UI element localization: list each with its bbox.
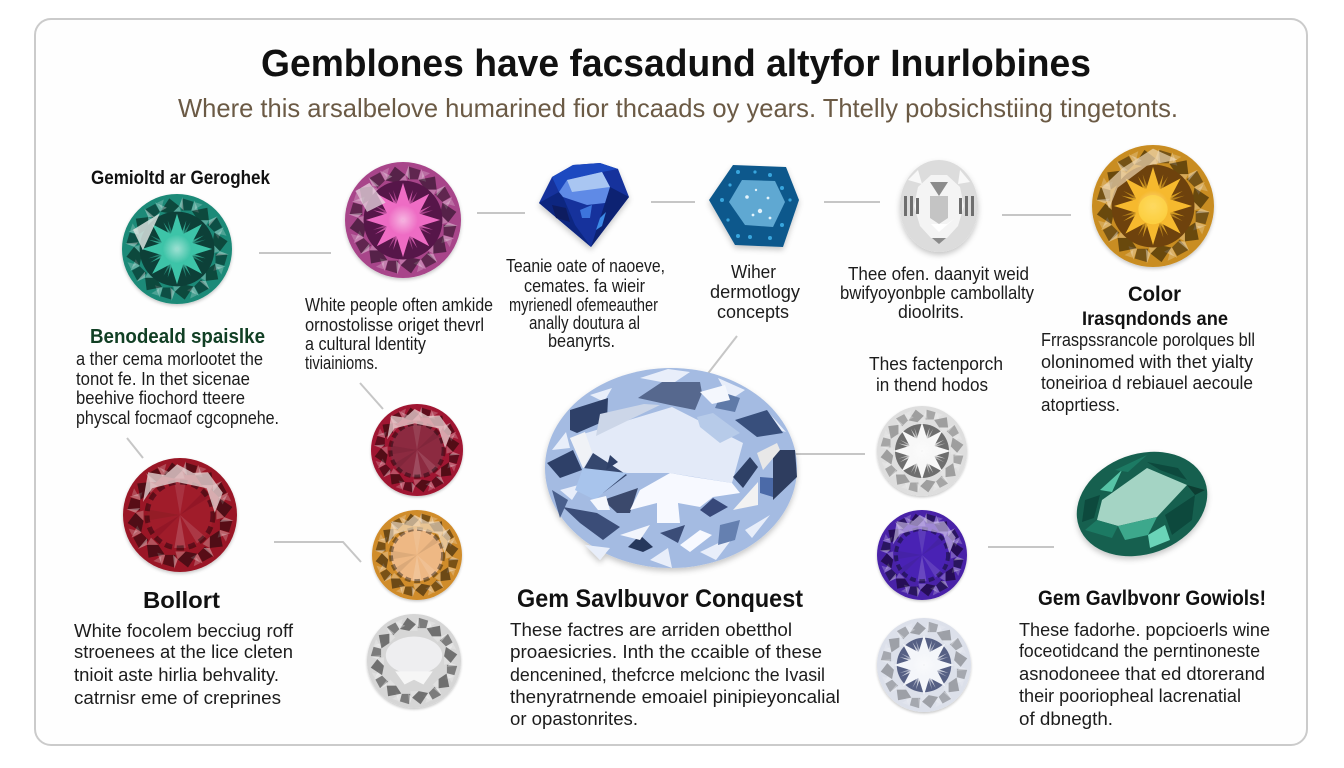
text: color description — [1041, 330, 1255, 415]
text: ruby description: catrnisr eme of creprines — [74, 688, 281, 708]
text: center description: proaesicries. Inth the ccaible of these — [510, 642, 822, 662]
heading: color — [1082, 283, 1228, 330]
text: ruby description: stroenees at the lice cleten — [74, 642, 293, 662]
gem: ruby large — [123, 458, 237, 572]
gem: clear round blue tint — [877, 618, 971, 712]
text: ruby description: tnioit aste hirlia behvality. — [74, 665, 279, 685]
text: hexagon description: concepts — [717, 302, 789, 322]
bright star facets — [630, 473, 740, 523]
text: ruby description: White focolem becciug roff — [74, 621, 294, 641]
text: factors caption: in thend hodos — [876, 375, 988, 395]
text: pink gem description: White people often amkide — [305, 295, 493, 315]
text: sapphire description — [506, 256, 665, 351]
outer small pale facets — [552, 369, 786, 568]
text: right lower description: of dbnegth. — [1019, 709, 1113, 729]
text: right lower description: asnodoneee that ed dtorerand — [1019, 664, 1265, 684]
text: hexagon description: Wiher — [731, 262, 776, 282]
subtitle: Where this arsalbelove humarined fior thcaads oy years. Thtelly pobsichstiing tingetonts. — [178, 93, 1178, 123]
text: pink gem description — [305, 295, 493, 373]
text: center description: or opastonrites. — [510, 709, 638, 729]
text: sapphire description: beanyrts. — [548, 331, 615, 351]
dark facets — [547, 382, 797, 552]
heading: teal gem: Benodeald spaislke — [90, 326, 265, 348]
gem: orange — [372, 510, 462, 600]
text: teal gem description: beehive fiochord tteere — [76, 388, 245, 408]
text: teal gem description: tonot fe. In thet sicenae — [76, 369, 250, 389]
text: sapphire description: myrienedl ofemeauther — [509, 295, 658, 315]
text: center description: dencenined, thefcrce melcionc the Ivasil — [510, 665, 825, 685]
gem: ruby small — [371, 404, 463, 496]
text: color description: Frraspssrancole porolques bll — [1041, 330, 1255, 350]
text: pink gem description: ornostolisse origet thevrl — [305, 315, 484, 335]
text: teal gem description — [76, 349, 279, 428]
text: hexagon description: dermotlogy — [710, 282, 800, 302]
bright side facets — [757, 443, 780, 470]
text: sapphire description: Teanie oate of naoeve, — [506, 256, 665, 276]
table facet — [570, 407, 743, 483]
text: sapphire description: anally doutura al — [529, 313, 640, 333]
title: Gemblones have facsadund altyfor Inurlobines — [261, 43, 1091, 85]
text: factors caption: Thes factenporch — [869, 354, 1003, 374]
label: gemological: Gemioltd ar Geroghek — [91, 168, 270, 189]
gem: large pale blue oval — [545, 368, 797, 568]
text: right lower description: These fadorhe. popcioerls wine — [1019, 620, 1270, 640]
text: right lower description: foceotidcand the perntinoneste — [1019, 641, 1260, 661]
gem: blue sapphire — [539, 163, 629, 247]
gem: clear round right — [877, 406, 967, 496]
text: teal gem description: a ther cema morlootet the — [76, 349, 263, 369]
heading: gem conquest: Gem Savlbuvor Conquest — [517, 585, 804, 613]
text: center description — [510, 620, 840, 729]
text: color description: atoprtiess. — [1041, 395, 1120, 415]
text: teal gem description: physcal focmaof cgcopnehe. — [76, 408, 279, 428]
gem: teal round — [122, 194, 232, 304]
text: sapphire description: cemates. fa wieir — [524, 276, 645, 296]
text: center description: These factres are arriden obetthol — [510, 620, 792, 640]
gem: clear oval — [900, 160, 978, 252]
text: right lower description: their pooriopheal lacrenatial — [1019, 686, 1241, 706]
text: center description: thenyratrnende emoaiel pinipieyoncalial — [510, 687, 840, 707]
text: hexagon description — [710, 262, 800, 322]
text: factors caption — [869, 354, 1003, 395]
connector lines — [127, 202, 1071, 562]
text: clear oval description: Thee ofen. daanyit weid — [848, 264, 1029, 284]
text: right lower description — [1019, 620, 1270, 729]
text: pink gem description: tiviainioms. — [305, 353, 378, 373]
gem: blue hexagon — [709, 165, 799, 247]
heading: color: Color — [1128, 283, 1181, 306]
text: color description: oloninomed with thet yialty — [1041, 352, 1253, 372]
text: ruby description — [74, 621, 294, 708]
gem: emerald oval — [1062, 434, 1222, 574]
gem: amber round — [1092, 145, 1214, 267]
text: clear oval description — [840, 264, 1034, 322]
text: clear oval description: bwifyoyonbple cambollalty — [840, 283, 1034, 303]
gem: purple round — [877, 510, 967, 600]
gem: pink round — [345, 162, 461, 278]
heading: gem gavlbvonr: Gem Gavlbvonr Gowiols! — [1038, 587, 1266, 610]
gem: clear round lower — [367, 614, 461, 708]
heading: bollort: Bollort — [143, 587, 220, 613]
text: pink gem description: a cultural ldentity — [305, 334, 426, 354]
heading: color: Irasqndonds ane — [1082, 309, 1228, 330]
text: clear oval description: dioolrits. — [898, 302, 964, 322]
text: color description: toneirioa d rebiauel aecoule — [1041, 373, 1253, 393]
